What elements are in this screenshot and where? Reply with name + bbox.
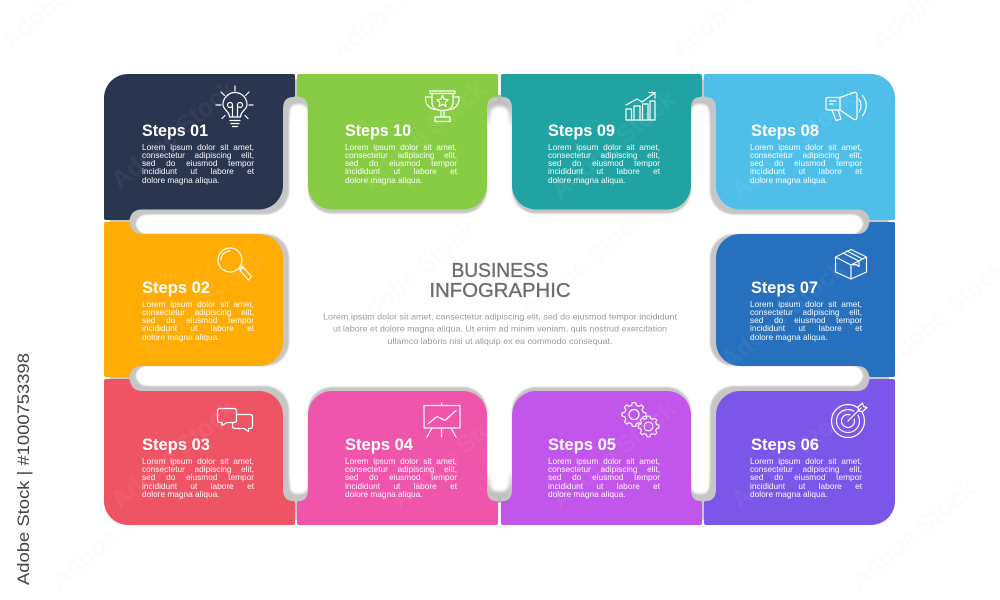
step text [142,300,254,342]
card shadows [110,78,889,521]
step text [345,457,457,499]
watermark over cards: Adobe Stock [136,245,271,365]
step text: incididunt ut labore et [142,481,254,491]
step title: Steps 03 [142,436,210,454]
card: Steps 10 [297,74,498,210]
step text [750,457,862,499]
step text: consectetur adipiscing elit, [142,307,254,317]
centre description: ut labore et dolore magna aliqua. Ut enim ad minim veniam, quis nostrud exercitation [333,324,667,334]
step text: dolore magna aliqua. [142,489,220,499]
step text: incididunt ut labore et [142,166,254,176]
card: Steps 06 [704,379,895,525]
step title: Steps 02 [142,279,210,297]
step text: incididunt ut labore et [142,323,254,333]
step text: sed do eiusmod tempor [750,158,862,168]
watermark over cards: Adobe Stock [386,395,521,515]
watermark over cards: Adobe Stock [726,85,861,205]
step text: consectetur adipiscing elit, [142,464,254,474]
card: Steps 03 [104,379,295,525]
centre description: Lorem ipsum dolor sit amet, consectetur adipiscing elit, sed do eiusmod tempor incididunt [323,312,678,322]
card: Steps 07 [716,222,895,377]
watermark over cards: Adobe Stock [546,85,681,205]
icon: gears [622,403,659,437]
step text: incididunt ut labore et [750,481,862,491]
step text [750,300,862,342]
watermark over cards: Adobe Stock [106,395,241,515]
step text: sed do eiusmod tempor [142,158,254,168]
centre heading: INFOGRAPHIC [430,279,571,302]
step text: incididunt ut labore et [548,166,660,176]
step text: consectetur adipiscing elit, [345,464,457,474]
card: Steps 01 [104,74,295,220]
icon: magnifier [218,248,252,280]
icon: light bulb [216,86,253,126]
step text [548,457,660,499]
step text: incididunt ut labore et [345,166,457,176]
step text: consectetur adipiscing elit, [548,464,660,474]
watermark over cards: Adobe Stock [726,395,861,515]
icon: target with arrow [832,403,867,438]
step text: incididunt ut labore et [750,166,862,176]
icon: growth chart [626,92,655,120]
card: Steps 02 [104,222,283,377]
step text: dolore magna aliqua. [548,489,626,499]
step text: consectetur adipiscing elit, [345,150,457,160]
step text: incididunt ut labore et [750,323,862,333]
icon: trophy [425,91,459,122]
step text: dolore magna aliqua. [345,489,422,499]
step text: sed do eiusmod tempor [345,158,457,168]
icon: chat bubbles [218,408,252,432]
step text: consectetur adipiscing elit, [548,150,660,160]
step text: dolore magna aliqua. [142,175,220,184]
step text: sed do eiusmod tempor [548,472,660,482]
centre heading: BUSINESS [452,259,548,282]
step text: dolore magna aliqua. [345,175,422,184]
watermark over cards [106,75,861,515]
watermark over cards: Adobe Stock [356,75,491,195]
step text: sed do eiusmod tempor [142,472,254,482]
step text: consectetur adipiscing elit, [750,307,862,317]
step text: consectetur adipiscing elit, [750,150,862,160]
step text [345,142,457,184]
step text: dolore magna aliqua. [750,175,828,184]
icon: parcel box [836,250,866,279]
centre description [323,312,678,346]
watermark over cards: Adobe Stock [546,395,681,515]
step text [142,457,254,499]
step title: Steps 06 [751,436,819,454]
step text: sed do eiusmod tempor [548,158,660,168]
step text [142,142,254,184]
notch shading between cards [283,95,716,503]
step text: consectetur adipiscing elit, [142,150,254,160]
step text: sed do eiusmod tempor [345,472,457,482]
step title: Steps 04 [345,436,414,454]
step text: incididunt ut labore et [345,481,457,491]
step text: dolore magna aliqua. [548,175,626,184]
step text: consectetur adipiscing elit, [750,464,862,474]
card: Steps 08 [704,74,895,220]
step title: Steps 08 [751,122,819,140]
step text: incididunt ut labore et [548,481,660,491]
centre heading [430,259,571,302]
step title: Steps 05 [548,436,616,454]
step title: Steps 09 [548,122,615,140]
step text: dolore magna aliqua. [142,332,220,342]
card: Steps 05 [501,391,702,525]
watermark over cards: Adobe Stock [106,75,241,195]
step title: Steps 10 [345,122,411,140]
icon: presentation board [424,403,460,437]
side stock label: Adobe Stock | #1000753398 [14,353,33,585]
icon: megaphone [826,92,866,120]
card: Steps 09 [501,74,702,210]
step text: dolore magna aliqua. [750,332,828,342]
step text: sed do eiusmod tempor [750,315,862,325]
centre description: ullamco laboris nisi ut aliquip ex ea commodo consequat. [388,336,612,346]
step text: dolore magna aliqua. [750,489,828,499]
step text: sed do eiusmod tempor [750,472,862,482]
card: Steps 04 [297,391,498,525]
step title: Steps 07 [751,279,818,297]
step title: Steps 01 [142,122,208,140]
step text: sed do eiusmod tempor [142,315,254,325]
watermark over cards: Adobe Stock [716,255,851,375]
step text [548,142,660,184]
step text [750,142,862,184]
